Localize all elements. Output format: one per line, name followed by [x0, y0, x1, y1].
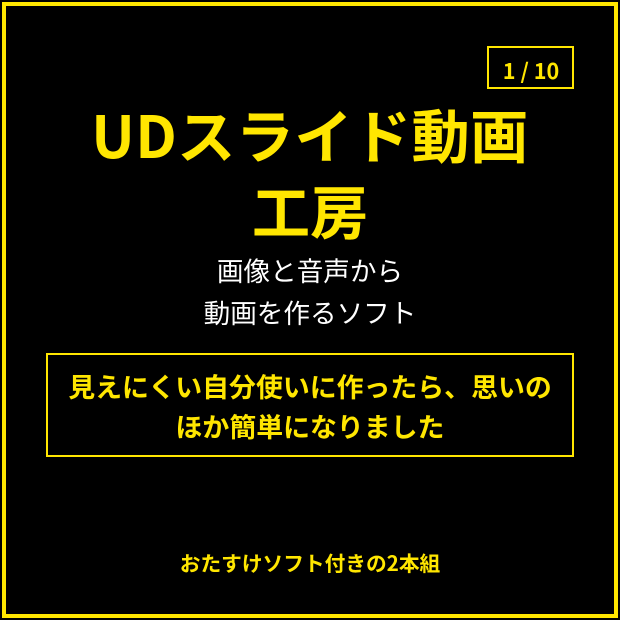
subtitle line 2: 動画を作るソフト: [204, 292, 416, 331]
title line 1: UDスライド動画: [91, 90, 529, 175]
subtitle line 1: 画像と音声から: [217, 250, 403, 289]
title line 2: 工房: [252, 166, 368, 251]
page badge: [487, 46, 574, 89]
footer note: おたすけソフト付きの2本組: [180, 547, 440, 577]
callout line 2: ほか簡単になりました: [176, 406, 444, 445]
callout box: [46, 353, 574, 457]
callout line 1: 見えにくい自分使いに作ったら、思いの: [68, 366, 552, 405]
page badge: 1 / 10: [503, 55, 559, 86]
